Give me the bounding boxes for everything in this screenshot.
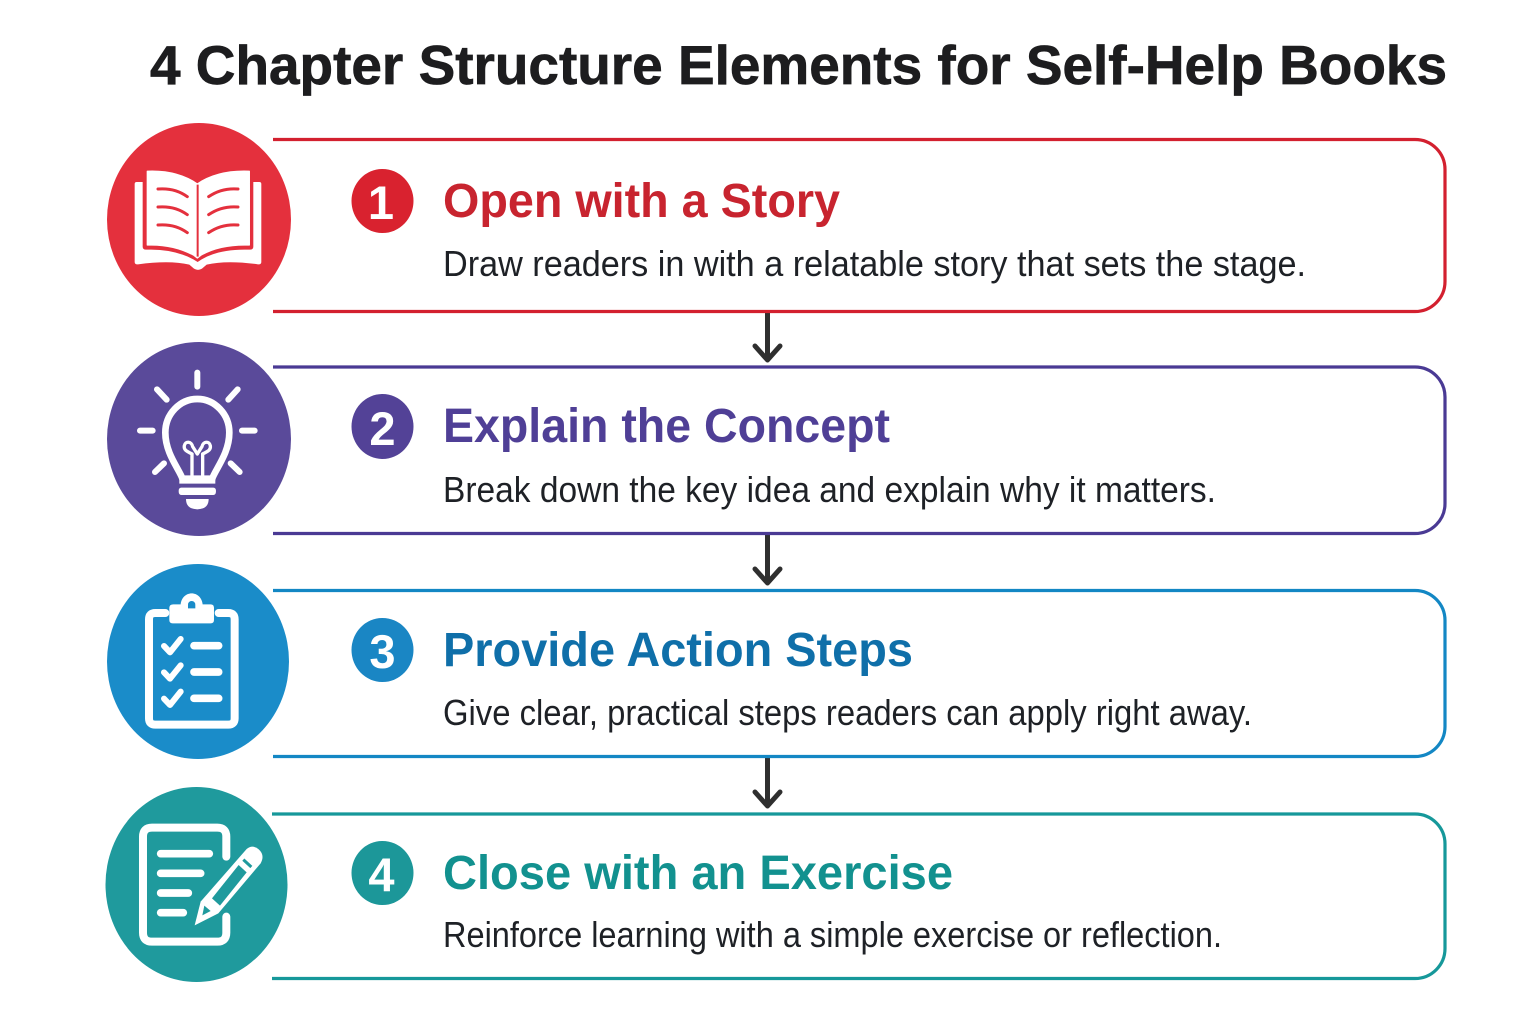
card outline 2 (273, 367, 1445, 534)
panel: step 1 open with a story (107, 123, 1445, 316)
panel: step 3 provide action steps (107, 564, 1445, 759)
heading 3: Provide Action Steps (443, 624, 913, 677)
description 4: Reinforce learning with a simple exercise or reflection. (443, 914, 1222, 955)
title: 4 Chapter Structure Elements for Self-Help Books (150, 34, 1447, 96)
number badge 3 (352, 618, 414, 682)
description 1: Draw readers in with a relatable story that sets the stage. (443, 243, 1306, 284)
heading 4: Close with an Exercise (443, 847, 953, 900)
number badge 4 (352, 841, 414, 905)
description 2: Break down the key idea and explain why it matters. (443, 469, 1216, 510)
number badge 1: 1 (368, 176, 394, 229)
icon: light bulb (107, 342, 291, 536)
icon: open book (107, 123, 291, 316)
heading 2: Explain the Concept (443, 400, 890, 453)
panel: step 4 close with an exercise (106, 787, 1445, 982)
card outline 1 (273, 140, 1445, 312)
arrow: step 1 to 2 (755, 313, 780, 360)
panel: step 2 explain the concept (107, 342, 1445, 536)
icon: clipboard checklist (107, 564, 289, 759)
description 3: Give clear, practical steps readers can apply right away. (443, 692, 1252, 733)
number badge 2 (352, 394, 414, 459)
number badge 4: 4 (368, 848, 395, 901)
icon: document and pencil (106, 787, 288, 982)
number badge 1 (352, 169, 414, 233)
card outline 3 (273, 590, 1445, 756)
arrow: step 3 to 4 (755, 758, 780, 806)
number badge 2: 2 (369, 402, 396, 455)
card outline 4 (272, 814, 1445, 978)
number badge 3: 3 (369, 625, 396, 678)
heading 1: Open with a Story (443, 175, 840, 228)
arrow: step 2 to 3 (755, 535, 780, 583)
